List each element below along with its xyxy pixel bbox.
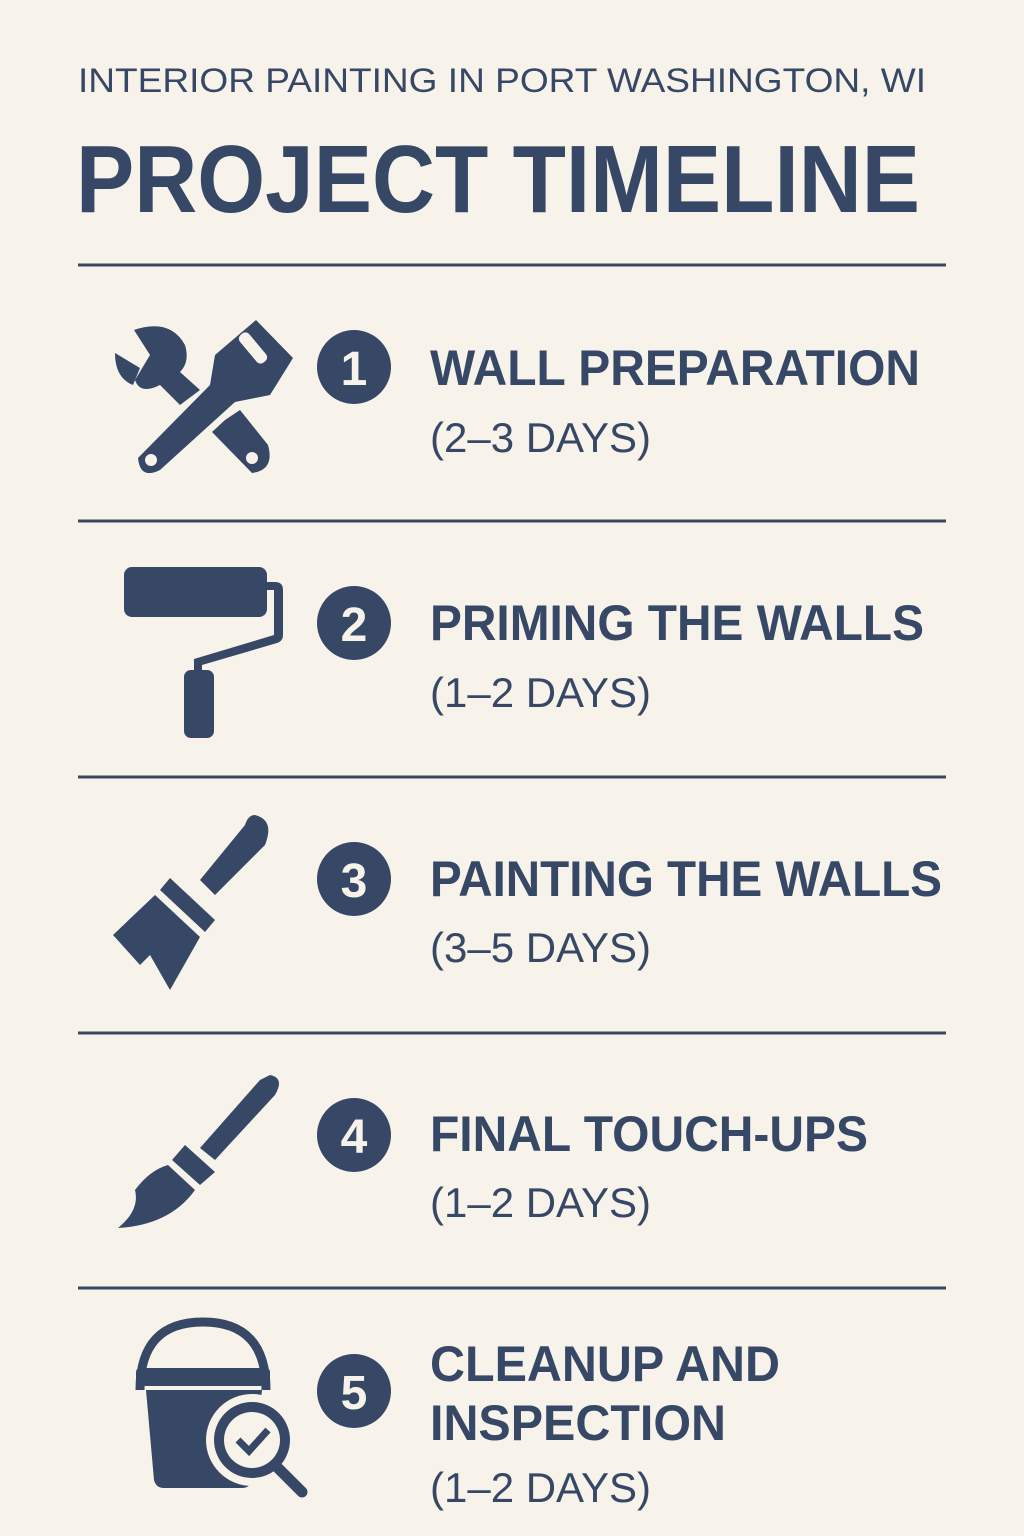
icon: paint brush [113, 815, 268, 990]
number badge 4 [317, 1098, 391, 1172]
title: PROJECT TIMELINE [76, 126, 920, 233]
step 2: priming [124, 567, 924, 738]
number badge 3: 3 [341, 855, 367, 908]
duration 3: (3–5 DAYS) [430, 924, 651, 971]
duration 2: (1–2 DAYS) [430, 669, 651, 716]
number badge 1 [317, 330, 391, 404]
icon: wrench and scraper [115, 320, 293, 473]
step 5: cleanup [136, 1322, 780, 1511]
icon: paint roller [124, 567, 283, 738]
icon: bucket with check magnifier [136, 1322, 302, 1492]
number badge 1: 1 [341, 343, 367, 396]
duration 4: (1–2 DAYS) [430, 1179, 651, 1226]
step 3: painting [113, 815, 942, 990]
subtitle: INTERIOR PAINTING IN PORT WASHINGTON, WI [78, 62, 926, 100]
heading 1: WALL PREPARATION [430, 340, 920, 396]
number badge 2: 2 [341, 599, 367, 652]
heading 3: PAINTING THE WALLS [430, 851, 942, 907]
step 1: wall preparation [115, 320, 920, 473]
duration 5: (1–2 DAYS) [430, 1464, 651, 1511]
number badge 2 [317, 586, 391, 660]
step 4: touch-ups [118, 1075, 868, 1228]
number badge 5: 5 [341, 1367, 367, 1420]
heading 4: FINAL TOUCH-UPS [430, 1106, 868, 1162]
duration 1: (2–3 DAYS) [430, 414, 651, 461]
number badge 3 [317, 842, 391, 916]
heading 5: CLEANUP AND [430, 1336, 780, 1392]
number badge 5 [317, 1354, 391, 1428]
icon: detail brush [118, 1075, 279, 1228]
step 5: cleanup: INSPECTION [430, 1395, 726, 1451]
heading 2: PRIMING THE WALLS [430, 595, 924, 651]
number badge 4: 4 [341, 1111, 368, 1164]
